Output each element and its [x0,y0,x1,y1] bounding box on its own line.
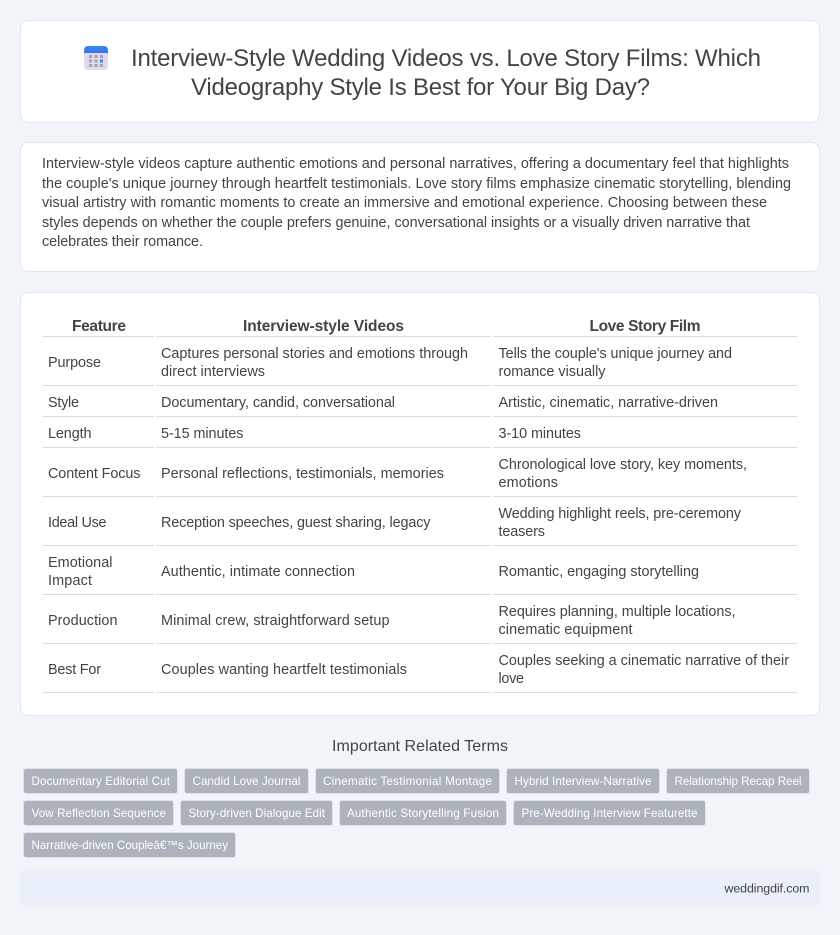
row: best for [43,653,797,692]
tag: Vow Reflection Sequence [32,807,166,820]
tag [184,768,308,794]
row: production: cinematic equipment [498,622,632,638]
text block: introduction paragraph: Interview-style videos capture authentic emotions and personal narratives, offering a documentary feel that highlights [42,156,789,172]
row: content focus: emotions [498,475,558,491]
row: purpose: direct interviews [161,364,265,380]
tag: Authentic Storytelling Fusion [347,807,499,820]
row: ideal use [43,506,797,546]
row: ideal use: teasers [498,524,545,540]
panel: related term tags [24,768,810,858]
row: style: Documentary, candid, conversational [161,395,395,411]
row: content focus: Chronological love story, key moments, [498,457,747,473]
row: production: Minimal crew, straightforward setup [161,613,390,629]
row: length: 3-10 minutes [498,426,581,442]
tag: Documentary Editorial Cut [32,775,171,788]
row: ideal use: Reception speeches, guest sharing, legacy [161,515,431,531]
panel: introduction [20,142,820,272]
title [131,45,761,101]
row: production: Requires planning, multiple locations, [498,604,736,620]
title: Videography Style Is Best for Your Big Day? [191,74,650,101]
row: purpose [43,346,797,386]
tag: Candid Love Journal [192,775,300,788]
row: purpose: Captures personal stories and emotions through [161,346,468,362]
row: content focus: Content Focus [48,466,140,482]
icon: calendar [84,46,108,70]
tag [24,768,178,794]
tag [340,800,506,826]
tag: Relationship Recap Reel [674,775,802,788]
tag [506,768,660,794]
row: purpose: Purpose [48,355,101,371]
row: ideal use: Wedding highlight reels, pre-ceremony [498,506,742,522]
row: content focus: Personal reflections, testimonials, memories [161,466,444,482]
row: style [43,395,797,416]
table header [43,318,797,336]
row: emotional impact: Authentic, intimate connection [161,564,355,580]
tag: Cinematic Testimonial Montage [323,775,492,788]
row: ideal use: Ideal Use [48,515,106,531]
row: purpose: Tells the couple's unique journey and [498,346,732,362]
tag: Pre-Wedding Interview Featurette [522,807,698,820]
tag [316,768,500,794]
row: best for: Best For [48,662,101,678]
row: content focus [43,457,797,496]
panel: header [20,20,820,122]
row: emotional impact: Impact [48,573,92,589]
table header: Love Story Film [590,318,700,335]
row: emotional impact: Romantic, engaging storytelling [498,564,699,580]
tag: Hybrid Interview-Narrative [514,775,652,788]
row: length: Length [48,426,92,442]
tag [666,768,810,794]
panel: comparison table [20,292,820,716]
tag [180,800,332,826]
row: best for: Couples seeking a cinematic narrative of their [498,653,789,669]
table header: Feature [72,318,126,335]
row: emotional impact: Emotional [48,555,112,571]
title: Interview-Style Wedding Videos vs. Love Story Films: Which [131,45,761,72]
footer: weddingdif.com [724,882,810,896]
tag [514,800,706,826]
tag: Story-driven Dialogue Edit [188,807,326,820]
text block: introduction paragraph: the couple's unique journey through heartfelt testimonials. Love story films emphasize cinematic storytelling, blending [42,176,791,192]
row: best for: Couples wanting heartfelt testimonials [161,662,407,678]
row: length [43,426,797,448]
text block: introduction paragraph: styles depends on whether the couple prefers genuine, conversational insights or a visually driven narrative that [42,215,750,231]
row: production: Production [48,613,118,629]
tag: Narrative-driven Coupleâ€™s Journey [32,839,228,852]
row: production [43,604,797,644]
table header: Interview-style Videos [243,318,404,335]
text block: introduction paragraph: visual artistry with romantic moments to create an immersive and emotional experience. Choosing between these [42,195,767,211]
text block: introduction paragraph: celebrates their romance. [42,234,203,250]
heading: important related terms: Important Related Terms [332,738,508,755]
tag [24,800,174,826]
footer [20,871,820,905]
row: length: 5-15 minutes [161,426,244,442]
row: purpose: romance visually [498,364,606,380]
tag [24,832,236,858]
row: emotional impact [43,555,797,594]
row: style: Style [48,395,79,411]
row: best for: love [498,671,524,687]
text block: introduction paragraph [42,156,791,250]
row: style: Artistic, cinematic, narrative-driven [498,395,718,411]
